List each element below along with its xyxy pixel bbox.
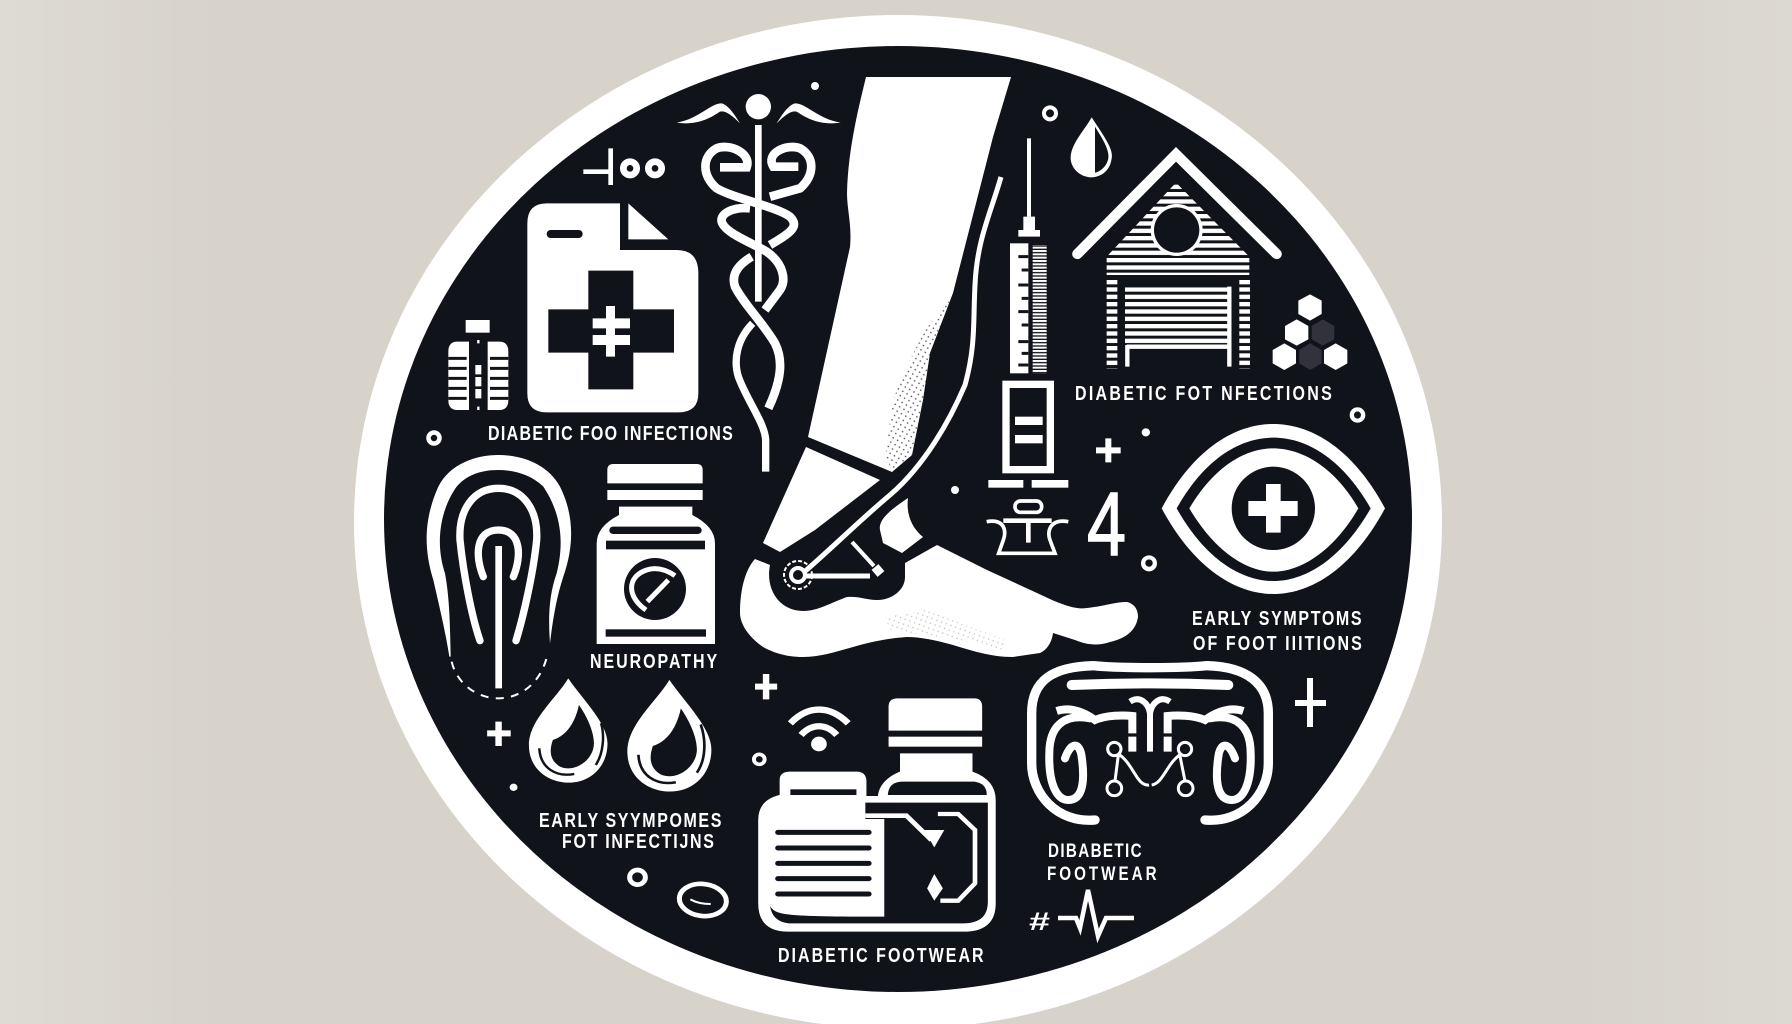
icon: hash and heartbeat line [1029, 890, 1134, 936]
small ring, plus and dots right [1096, 409, 1363, 462]
label: neuropathy: NEUROPATHY [590, 650, 717, 672]
black circular panel [384, 46, 1412, 992]
number four and markers: 4 [1087, 475, 1126, 575]
foot [740, 545, 1138, 657]
ankle section [763, 447, 880, 552]
label: early symptoms of foot: EARLY SYMPTOMS [1192, 607, 1362, 629]
icon: syringe plunger base [987, 480, 1068, 553]
icon: house [1077, 154, 1277, 368]
label: diabetic footwear: DIABETIC FOOTWEAR [778, 944, 984, 966]
icon: hexagon cluster [1273, 294, 1347, 370]
label: dibabetic footwear: DIBABETIC [1048, 839, 1142, 861]
label: diabetic fot nfections: DIABETIC FOT NFECTIONS [1075, 382, 1332, 404]
plus right [1295, 678, 1326, 727]
ring dot left [428, 432, 440, 444]
icon: pair of bottles [758, 698, 996, 932]
icon: wifi signal [790, 710, 848, 751]
icon: caduceus [677, 82, 841, 472]
label: dibabetic footwear [1047, 839, 1157, 884]
label: early symptoms of foot: OF FOOT IIITIONS [1193, 632, 1362, 654]
ankle joint marker [784, 542, 881, 589]
label: early symptoms of foot [1192, 607, 1362, 654]
icon: insole [427, 455, 571, 698]
decorative plus, dots and rings lower left [487, 674, 777, 919]
label: early symptomes foot infections: EARLY SYYMPOMES [539, 809, 721, 831]
heel piece [880, 498, 923, 553]
icon: eye with cross [1142, 409, 1385, 594]
label: early symptomes foot infections: FOT INFECTIJNS [562, 830, 714, 852]
number four and markers [951, 475, 1154, 575]
central foot and leg illustration [740, 77, 1138, 657]
icon: hash and heartbeat line: # [1029, 908, 1050, 936]
white circular border [354, 15, 1442, 1024]
icon: water drop and ring [1044, 107, 1112, 177]
leg [808, 77, 1011, 472]
label: early symptomes foot infections [539, 809, 721, 852]
icon: syringe [1006, 138, 1050, 470]
icon: minus and zeros mark [583, 148, 662, 185]
icon: small bottle [448, 320, 508, 410]
icon: medicine jar [597, 464, 715, 644]
icon: blood drops [529, 678, 711, 792]
icon: first aid kit [527, 203, 698, 412]
icon: organ diagram [1032, 666, 1268, 820]
curved vein line [803, 177, 1001, 573]
label: dibabetic footwear: FOOTWEAR [1047, 862, 1157, 884]
label: diabetic foo infections: DIABETIC FOO INFECTIONS [488, 422, 733, 444]
